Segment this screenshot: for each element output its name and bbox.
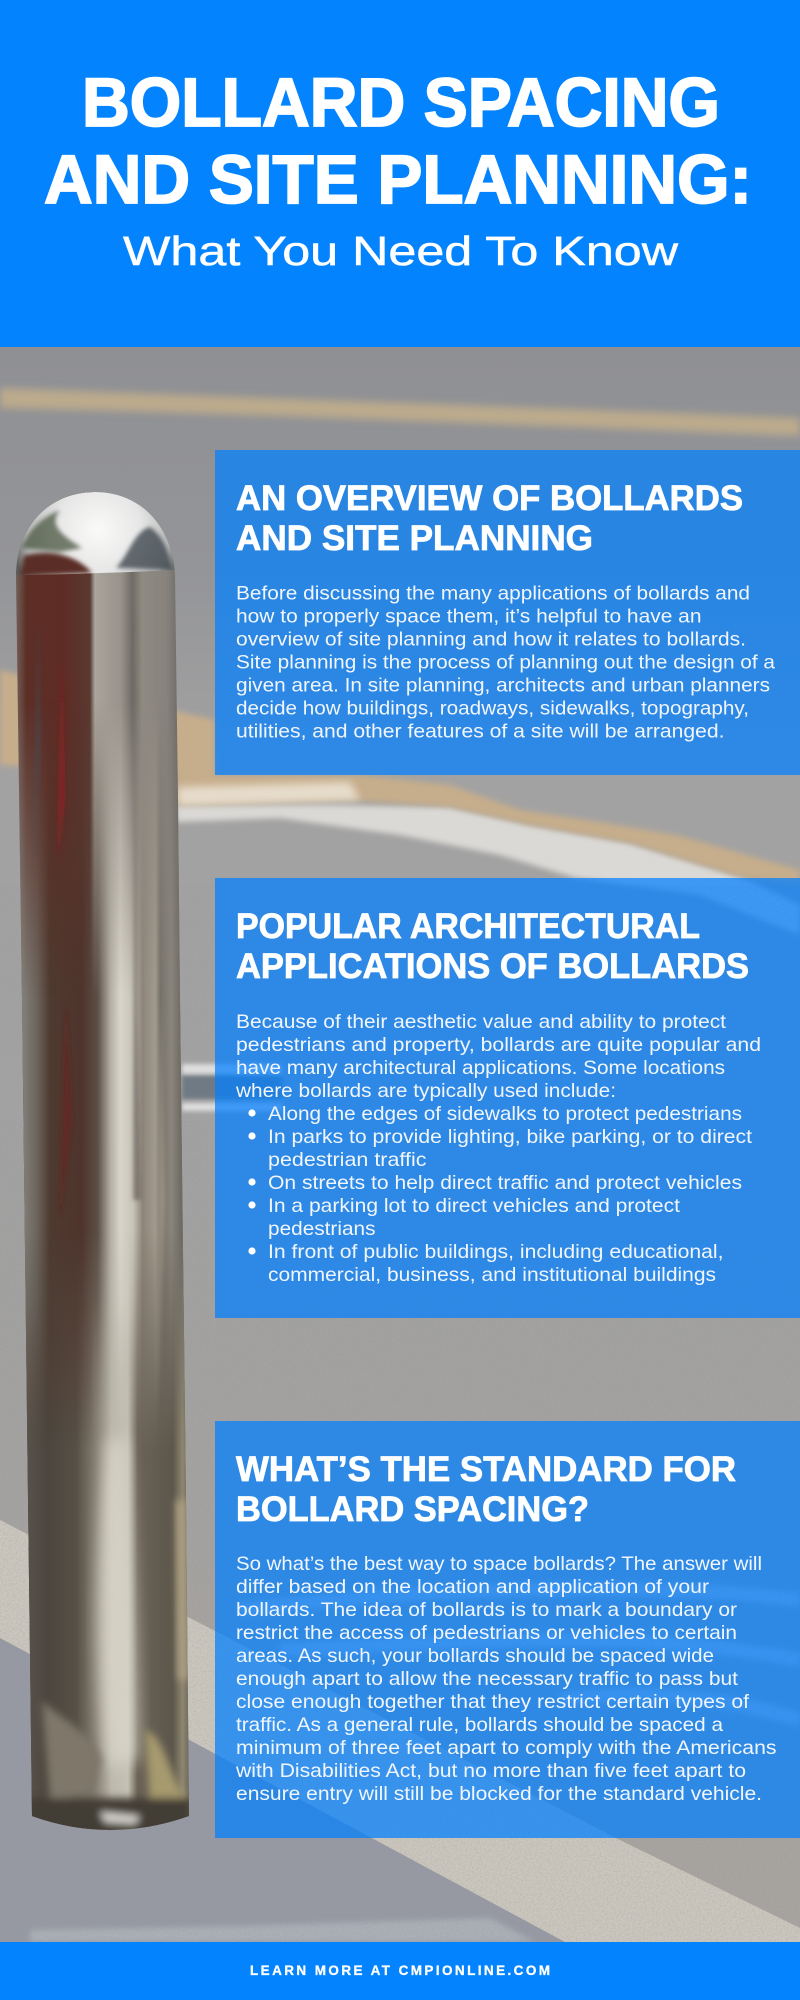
text block: applications intro: where bollards are typically used include: xyxy=(235,1080,616,1102)
bullet list: applications: Along the edges of sidewalks to protect pedestrians xyxy=(268,1103,742,1125)
heading: overview xyxy=(236,479,743,558)
footer band xyxy=(0,1942,800,2000)
text block: standard spacing: So what’s the best way to space bollards? The answer will xyxy=(236,1553,762,1575)
text block: standard spacing: areas. As such, your bollards should be spaced wide xyxy=(236,1645,714,1667)
road: concrete band xyxy=(0,1520,800,1942)
text block: standard spacing: minimum of three feet apart to comply with the Americans xyxy=(236,1737,777,1759)
panel: overview xyxy=(215,450,800,775)
panel: standard spacing xyxy=(215,1421,800,1838)
title xyxy=(44,64,752,218)
bollard: white reflection xyxy=(98,1440,138,1768)
text block: standard spacing xyxy=(235,1553,777,1805)
road: short white and dark marks beside the bollard xyxy=(182,1064,282,1111)
text block: overview: Before discussing the many applications of bollards and xyxy=(236,582,750,604)
text block: overview xyxy=(236,582,775,742)
road: blue-grey asphalt at the bottom xyxy=(0,1638,565,1942)
bullet list: applications: pedestrians xyxy=(268,1218,376,1240)
background photo: road surface xyxy=(0,347,800,1942)
text block: standard spacing: traffic. As a general rule, bollards should be spaced a xyxy=(236,1714,723,1736)
text block: applications intro: have many architectural applications. Some locations xyxy=(236,1057,725,1079)
text block: standard spacing: close enough together that they restrict certain types of xyxy=(236,1691,750,1713)
text block: standard spacing: with Disabilities Act, but no more than five feet apart to xyxy=(235,1760,746,1782)
road: speckle on lower asphalt xyxy=(0,1120,800,1942)
text block: standard spacing: differ based on the location and application of your xyxy=(236,1576,710,1598)
bollard: polished dome xyxy=(16,492,174,575)
heading: architectural applications xyxy=(236,907,749,986)
heading: standard spacing: BOLLARD SPACING? xyxy=(236,1490,589,1529)
road: white curved line xyxy=(176,805,800,935)
heading: standard spacing xyxy=(236,1450,736,1529)
text block: overview: utilities, and other features of a site will be arranged. xyxy=(236,720,724,742)
bullet list: applications: In parks to provide lighting, bike parking, or to direct xyxy=(268,1126,753,1148)
road: pale strip along the bottom xyxy=(30,1918,535,1942)
title: BOLLARD SPACING xyxy=(82,64,720,141)
text block: standard spacing: enough apart to allow the necessary traffic to pass but xyxy=(236,1668,739,1690)
bollard: lower reflections xyxy=(28,1500,192,1838)
bullet list: applications: In a parking lot to direct vehicles and protect xyxy=(268,1195,681,1217)
header band xyxy=(0,0,800,347)
bullet list: applications: pedestrian traffic xyxy=(268,1149,427,1171)
heading: overview: AND SITE PLANNING xyxy=(236,519,593,558)
bullet list: applications: commercial, business, and institutional buildings xyxy=(268,1264,716,1286)
bullet list: applications: On streets to help direct traffic and protect vehicles xyxy=(268,1172,742,1194)
text block: applications intro: Because of their aesthetic value and ability to protect xyxy=(236,1011,727,1033)
bullet list: applications: In front of public buildings, including educational, xyxy=(268,1241,724,1263)
text block: standard spacing: bollards. The idea of bollards is to mark a boundary or xyxy=(236,1599,738,1621)
road: speckle on mid asphalt xyxy=(0,885,800,1055)
footer call to action: LEARN MORE AT CMPIONLINE.COM xyxy=(250,1963,550,1978)
heading: architectural applications: APPLICATIONS OF BOLLARDS xyxy=(236,947,749,986)
text block: standard spacing: restrict the access of pedestrians or vehicles to certain xyxy=(236,1622,737,1644)
heading: overview: AN OVERVIEW OF BOLLARDS xyxy=(236,479,743,518)
bullet list: applications xyxy=(248,1103,753,1286)
subtitle: What You Need To Know xyxy=(123,228,678,274)
text block: overview: overview of site planning and how it relates to bollards. xyxy=(236,628,746,650)
heading: standard spacing: WHAT’S THE STANDARD FOR xyxy=(236,1450,736,1489)
bollard xyxy=(16,492,189,1830)
road: pale cream highlight xyxy=(178,782,360,806)
heading: architectural applications: POPULAR ARCHITECTURAL xyxy=(236,907,700,946)
panel: architectural applications xyxy=(215,878,800,1318)
text block: overview: Site planning is the process of planning out the design of a xyxy=(236,652,775,674)
text block: standard spacing: ensure entry will still be blocked for the standard vehicle. xyxy=(236,1783,762,1805)
text block: overview: how to properly space them, it’s helpful to have an xyxy=(236,606,702,628)
text block: overview: given area. In site planning, architects and urban planners xyxy=(236,674,770,696)
road: upper yellow line xyxy=(0,388,800,436)
text block: overview: decide how buildings, roadways, sidewalks, topography, xyxy=(236,698,749,720)
title: AND SITE PLANNING: xyxy=(44,141,752,218)
text block: applications intro: pedestrians and property, bollards are quite popular and xyxy=(236,1034,761,1056)
bollard: reflection streaks xyxy=(35,664,166,1359)
road: light streaks under third panel xyxy=(240,1589,800,1720)
text block: applications intro xyxy=(235,1011,761,1102)
road: lower yellow line xyxy=(0,670,800,885)
